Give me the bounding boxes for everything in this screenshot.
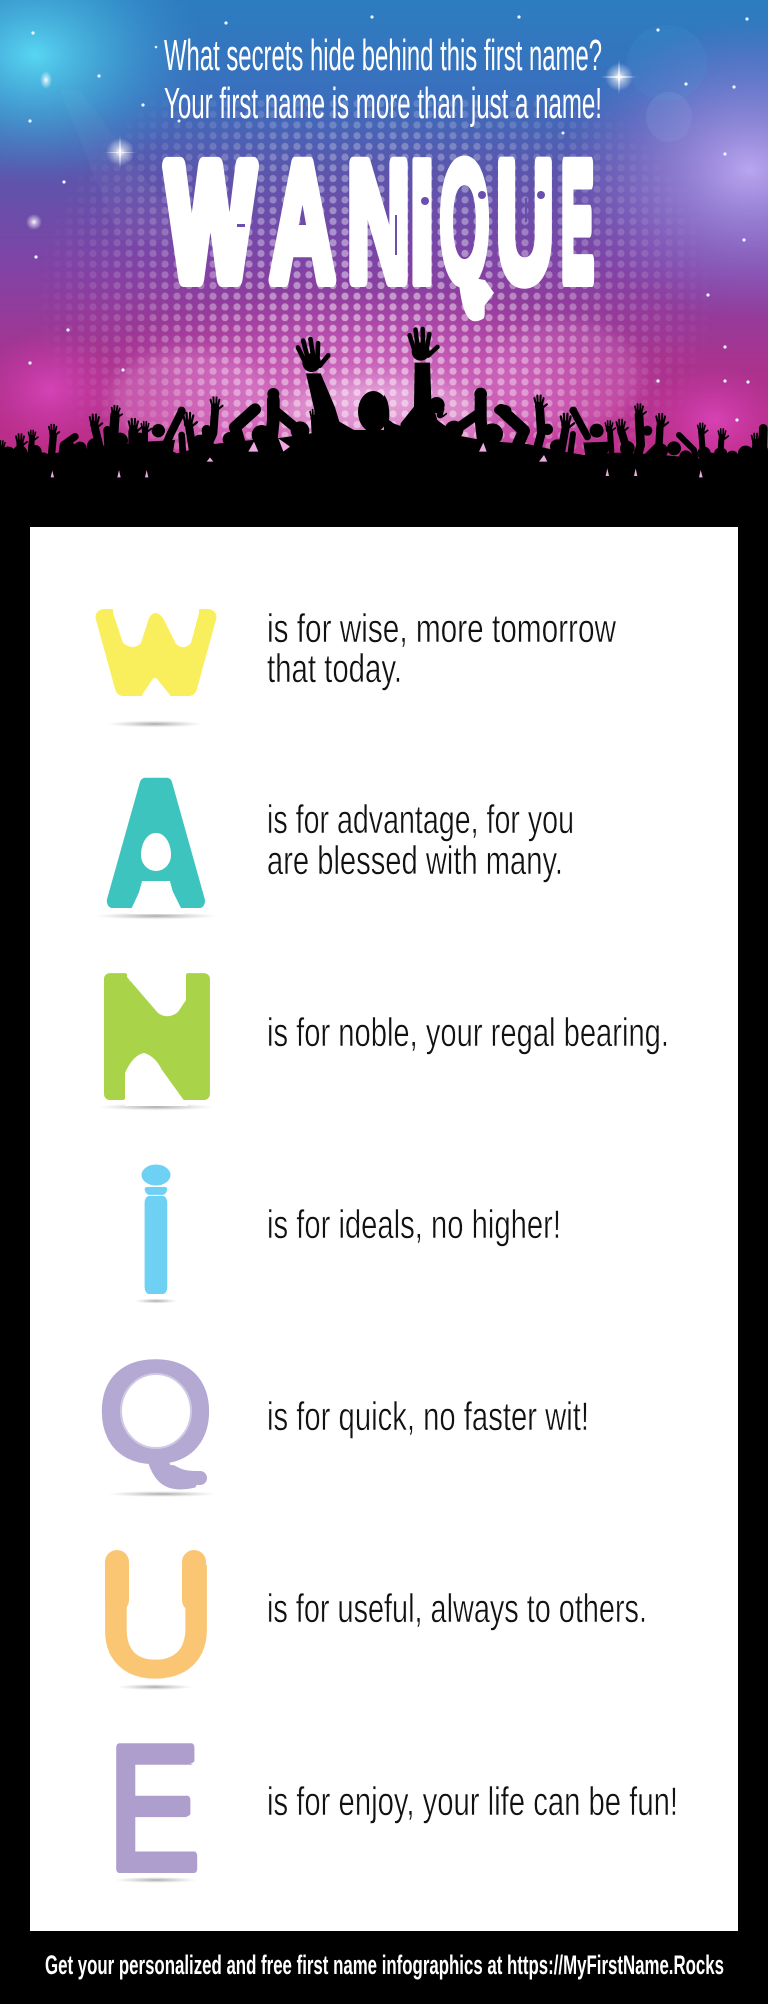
crowd: left half xyxy=(0,336,389,490)
letter Q: Q xyxy=(98,1333,213,1490)
row N xyxy=(98,944,669,1130)
letter U: U xyxy=(95,1519,217,1711)
gaps in crowd xyxy=(51,438,290,477)
crowd silhouette xyxy=(0,328,768,490)
shadow W xyxy=(107,720,203,728)
crowd: right half xyxy=(384,328,768,490)
name text: I xyxy=(407,122,437,323)
panel: letters xyxy=(30,527,738,1931)
Q tail xyxy=(455,275,494,308)
row Q xyxy=(98,1333,589,1497)
letter I xyxy=(138,1143,174,1321)
text A xyxy=(267,798,574,883)
name text: A xyxy=(270,127,335,316)
shadow I xyxy=(134,1298,178,1304)
sparkles xyxy=(26,15,750,422)
hero background xyxy=(0,0,768,458)
shadow N xyxy=(98,1104,214,1110)
title: name xyxy=(167,122,594,323)
text W: that today. xyxy=(267,647,402,691)
shadow A xyxy=(94,912,218,920)
shadow E xyxy=(114,1877,198,1883)
letter E: E xyxy=(108,1709,200,1907)
text I: is for ideals, no higher! xyxy=(267,1203,561,1247)
heading: question lines xyxy=(164,31,602,128)
text W xyxy=(267,607,616,691)
gaps in crowd right xyxy=(479,443,703,477)
row I xyxy=(134,1143,561,1321)
text W: is for wise, more tomorrow xyxy=(267,607,616,651)
shadow Q xyxy=(107,1491,217,1497)
text Q: is for quick, no faster wit! xyxy=(267,1395,589,1439)
row A xyxy=(94,748,574,937)
shadow U xyxy=(117,1684,193,1690)
name text: U xyxy=(496,126,554,318)
letter I: i xyxy=(142,1143,170,1321)
letter A: A xyxy=(109,748,203,937)
row E xyxy=(108,1709,678,1907)
row W xyxy=(104,595,616,728)
infographic: E xyxy=(561,127,594,316)
text A: is for advantage, for you xyxy=(267,798,574,842)
text A: are blessed with many. xyxy=(267,839,563,883)
name text: W xyxy=(167,130,254,313)
letter N: N xyxy=(99,944,215,1130)
name text: N xyxy=(347,127,410,316)
row U xyxy=(95,1519,647,1711)
letter W: W xyxy=(104,595,209,710)
distress marks xyxy=(237,172,545,255)
name text: Q xyxy=(439,124,490,319)
